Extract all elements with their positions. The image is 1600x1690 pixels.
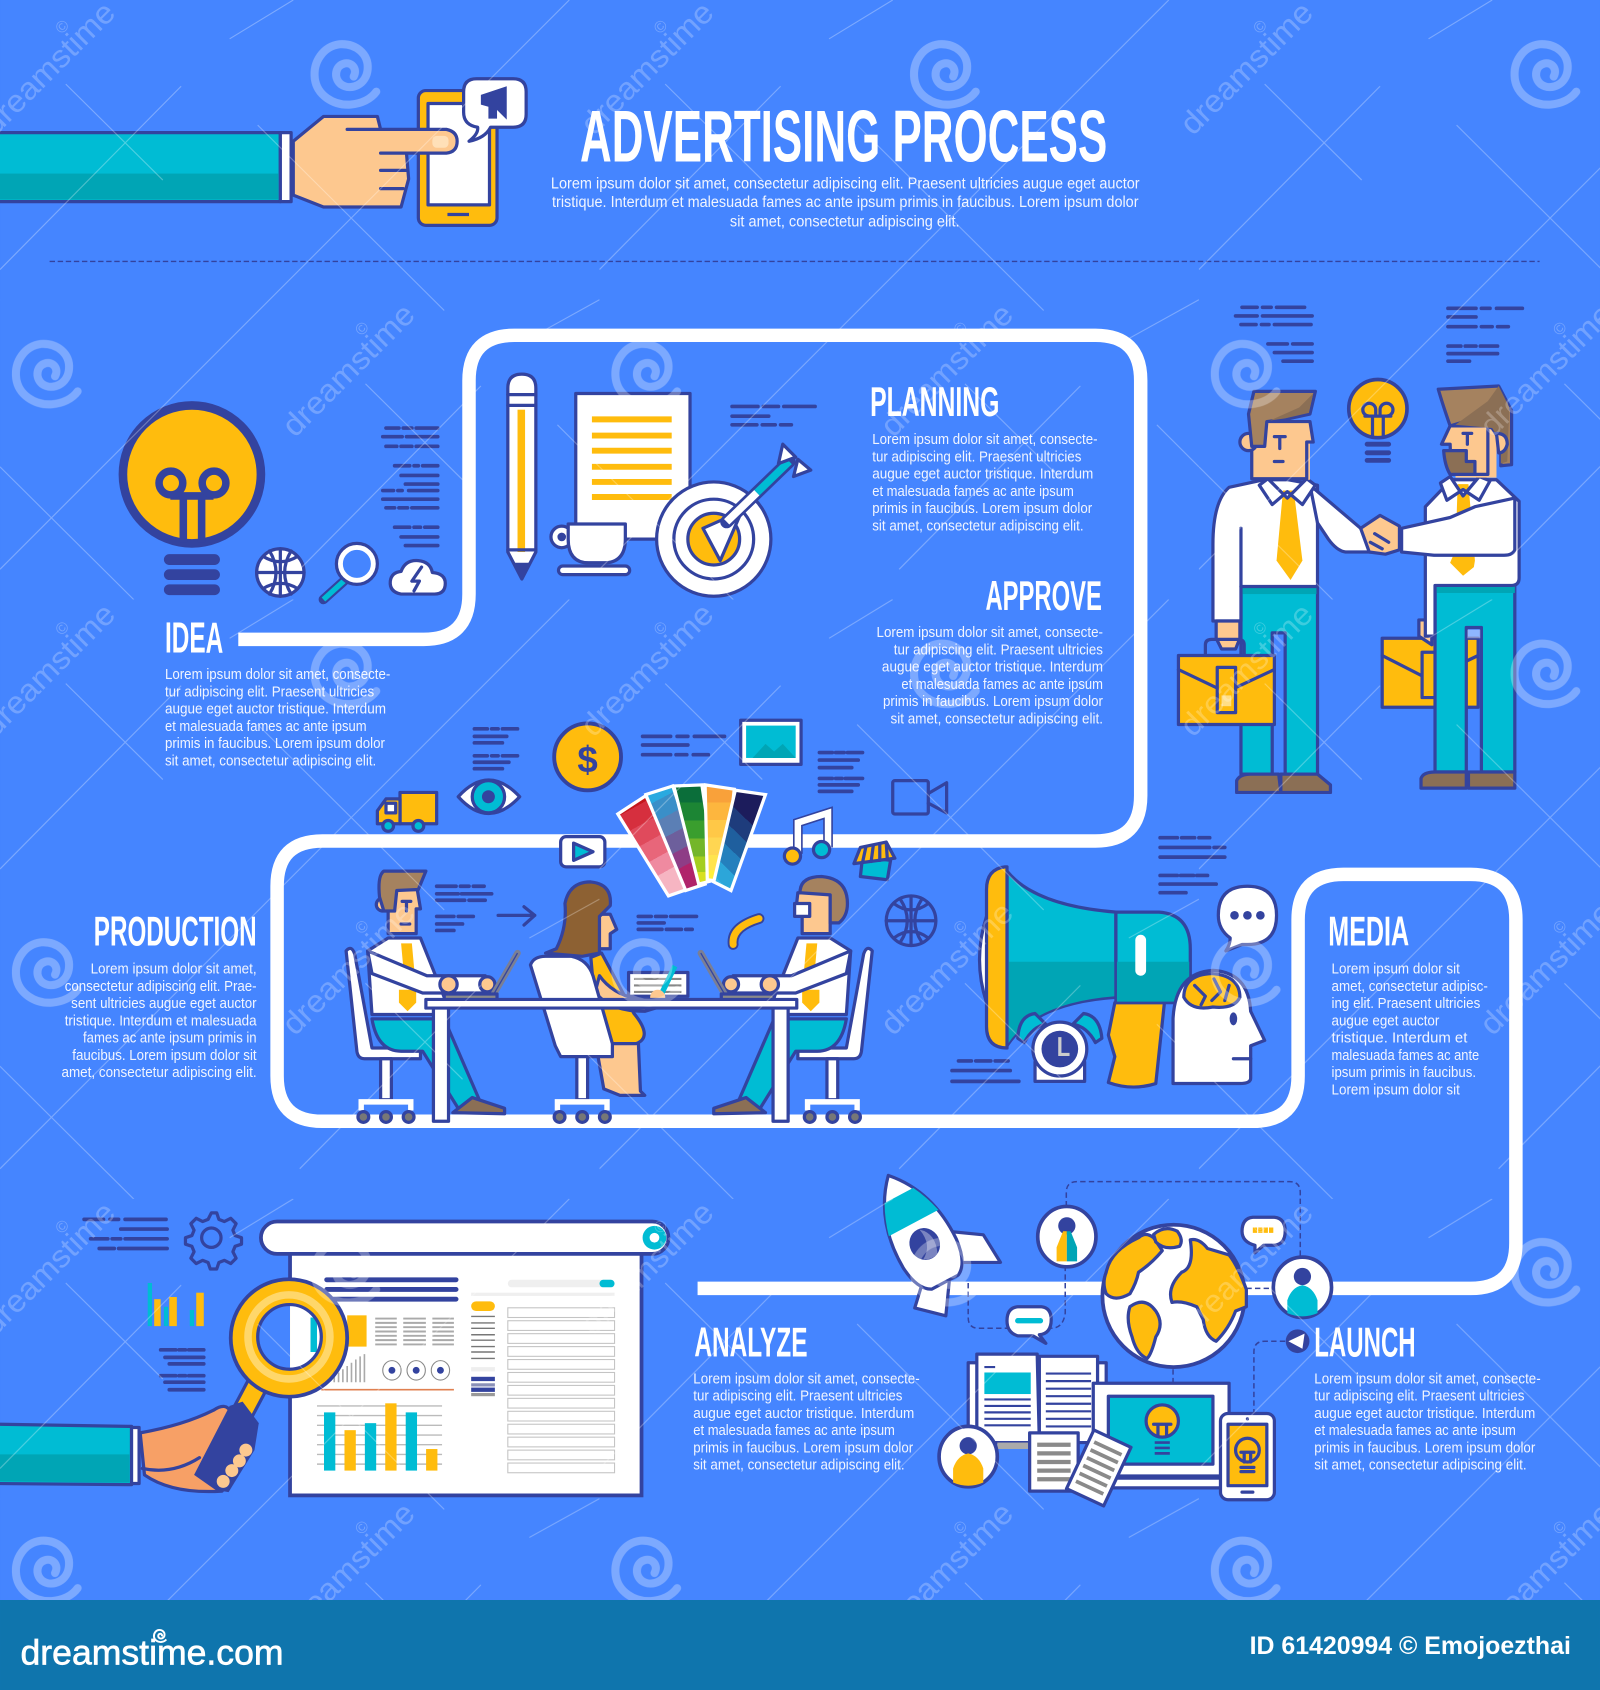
bar chart	[317, 1403, 442, 1471]
approve text	[877, 625, 1103, 727]
watermark overlay: ©	[1549, 917, 1571, 938]
launch text: et malesuada fames ac ante ipsum	[1314, 1423, 1516, 1439]
icon: speech bubble	[1218, 886, 1277, 951]
intro text	[551, 176, 1140, 230]
media text: tristique. Interdum et	[1332, 1031, 1467, 1047]
icon: picture frame	[741, 720, 801, 764]
approve text: tur adipiscing elit. Praesent ultricies	[894, 642, 1103, 658]
panel: idea	[123, 405, 445, 769]
heading: analyze: ANALYZE	[694, 1318, 808, 1365]
icon: video camera	[893, 781, 947, 814]
sleeve	[0, 133, 291, 202]
production text: faucibus. Lorem ipsum dolor sit	[72, 1048, 257, 1064]
icon: mini bar chart	[148, 1283, 204, 1326]
dashed connectors	[968, 1182, 1300, 1412]
icon: send arrow	[1286, 1329, 1309, 1353]
planning text: Lorem ipsum dolor sit amet, consecte-	[872, 432, 1098, 448]
icon: speech bubble	[1007, 1307, 1051, 1343]
sleeve	[0, 1424, 139, 1485]
watermark overlay: dreamstime	[275, 895, 422, 1042]
icon: globe	[257, 549, 304, 596]
analyze text: augue eget auctor tristique. Interdum	[693, 1406, 914, 1422]
seated man right	[701, 877, 872, 1122]
launch text: primis in faucibus. Lorem ipsum dolor	[1314, 1440, 1535, 1456]
heading: media: MEDIA	[1328, 908, 1409, 955]
panel: production	[61, 720, 947, 1122]
watermark overlay: dreamstime	[873, 297, 1020, 443]
text lines	[1160, 838, 1225, 893]
heading: idea: IDEA	[165, 614, 223, 662]
body text: sit amet, consectetur adipiscing elit.	[165, 753, 376, 769]
hand	[293, 116, 457, 207]
panel: launch	[854, 1148, 1541, 1506]
text lines	[819, 753, 863, 791]
icon: phone handset	[733, 919, 759, 944]
text lines	[161, 1350, 204, 1390]
watermark overlay: ©	[352, 318, 373, 339]
watermark overlay: dreamstime	[275, 1495, 422, 1642]
watermark overlay: ©	[1250, 16, 1271, 38]
body text: et malesuada fames ac ante ipsum	[165, 719, 367, 735]
body text: Lorem ipsum dolor sit amet, consecte-	[165, 667, 390, 683]
launch text: tur adipiscing elit. Praesent ultricies	[1314, 1389, 1525, 1405]
media text: Lorem ipsum dolor sit	[1332, 962, 1460, 978]
watermark overlay: ©	[950, 917, 971, 938]
approve text: et malesuada fames ac ante ipsum	[901, 677, 1103, 693]
handshake	[1361, 498, 1515, 555]
icon: rocket	[854, 1148, 1011, 1327]
planning text: et malesuada fames ac ante ipsum	[872, 484, 1074, 500]
launch text: Lorem ipsum dolor sit amet, consecte-	[1314, 1371, 1541, 1387]
analyze text: et malesuada fames ac ante ipsum	[693, 1423, 895, 1439]
icon: smartphone	[1220, 1413, 1274, 1500]
approve text: primis in faucibus. Lorem ipsum dolor	[883, 694, 1103, 710]
heading: production: PRODUCTION	[94, 908, 257, 955]
icon: play button	[561, 837, 605, 867]
watermark overlay: dreamstime	[1173, 0, 1320, 141]
analyze text: primis in faucibus. Lorem ipsum dolor	[693, 1440, 913, 1456]
heading: planning: PLANNING	[870, 378, 999, 425]
hand holding magnifier	[140, 1382, 259, 1492]
icon: target with arrow	[657, 444, 811, 596]
icon: gear	[185, 1213, 242, 1269]
icon: pencil	[508, 374, 536, 579]
icon: user avatar bottom	[939, 1426, 997, 1487]
icon: magnifier	[323, 543, 377, 599]
heading: approve: APPROVE	[985, 572, 1102, 619]
footer credit: ID 61420994 © Emojoezthai	[1250, 1633, 1571, 1660]
watermark overlay: ©	[650, 1216, 671, 1238]
planning text: tur adipiscing elit. Praesent ultricies	[872, 449, 1081, 465]
analyze text	[693, 1371, 920, 1474]
icon: megaphone	[980, 867, 1190, 1087]
table	[426, 999, 797, 1121]
report sheet	[290, 1251, 642, 1495]
text lines	[732, 406, 815, 425]
icon: light bulb	[123, 405, 261, 590]
watermark overlay: dreamstime	[1173, 1195, 1320, 1341]
icon: coffee cup	[551, 524, 630, 575]
production text: sent ultricies augue eget auctor	[71, 996, 257, 1012]
media text: malesuada fames ac ante	[1332, 1048, 1479, 1064]
media text: amet, consectetur adipisc-	[1332, 979, 1488, 995]
watermark overlay: dreamstime	[574, 596, 720, 743]
man with beard	[1382, 386, 1519, 788]
icon: alarm clock	[1018, 1013, 1102, 1081]
icon: eye	[458, 780, 520, 813]
text lines	[643, 736, 725, 755]
production text: amet, consectetur adipiscing elit.	[61, 1065, 257, 1081]
approve text: Lorem ipsum dolor sit amet, consecte-	[877, 625, 1103, 641]
body text: tur adipiscing elit. Praesent ultricies	[165, 684, 374, 700]
icon: magnifying glass	[231, 1279, 347, 1397]
footer logo: dreamstime.com	[20, 1633, 284, 1673]
analyze text: sit amet, consectetur adipiscing elit.	[693, 1458, 905, 1474]
arrow	[498, 907, 535, 925]
scroll roll	[261, 1222, 668, 1254]
panel: analyze	[0, 1213, 920, 1495]
title: ADVERTISING PROCESS	[580, 96, 1107, 178]
planning text: augue eget auctor tristique. Interdum	[872, 467, 1093, 483]
watermark overlay: ©	[52, 16, 73, 38]
watermark overlay: dreamstime	[574, 0, 720, 141]
icon: small speech bubble	[1242, 1217, 1285, 1253]
media text: augue eget auctor	[1332, 1013, 1439, 1029]
watermark overlay: ©	[352, 917, 373, 938]
header illustration: hand touching phone	[0, 79, 526, 225]
icon: document	[576, 394, 690, 539]
text lines	[638, 916, 696, 929]
watermark overlay: dreamstime	[275, 297, 422, 443]
icon: idea bulb	[1349, 380, 1407, 460]
icon: speech bubble with megaphone	[464, 79, 526, 141]
watermark overlay: ©	[650, 618, 671, 639]
planning text	[872, 432, 1098, 534]
icon: music note	[784, 813, 830, 864]
footer bar	[0, 1600, 1600, 1690]
icon: monitor	[1093, 1383, 1229, 1488]
intro text: sit amet, consectetur adipiscing elit.	[730, 213, 960, 230]
seated man left	[346, 871, 518, 1122]
approve text: augue eget auctor tristique. Interdum	[882, 660, 1103, 676]
body text	[165, 667, 390, 769]
launch text: augue eget auctor tristique. Interdum	[1314, 1406, 1535, 1422]
illustration: two businessmen shaking hands	[1178, 307, 1522, 792]
seated woman	[530, 882, 688, 1122]
media text: ing elit. Praesent ultricies	[1332, 996, 1480, 1012]
watermark overlay: ©	[352, 1517, 373, 1538]
panel: planning and approve	[508, 374, 1103, 727]
icon: dollar coin	[554, 723, 621, 790]
analyze text: Lorem ipsum dolor sit amet, consecte-	[693, 1371, 920, 1387]
man in front	[1178, 391, 1371, 792]
production text: fames ac ante ipsum primis in	[83, 1031, 257, 1047]
watermark overlay: ©	[950, 318, 971, 339]
icon: truck	[377, 792, 437, 831]
launch text	[1314, 1371, 1541, 1474]
watermark overlay: dreamstime	[873, 895, 1020, 1042]
launch text: sit amet, consectetur adipiscing elit.	[1314, 1458, 1527, 1474]
watermark overlay: ©	[1250, 618, 1271, 639]
production text: consectetur adipiscing elit. Prae-	[65, 979, 257, 995]
body text: augue eget auctor tristique. Interdum	[165, 702, 386, 718]
watermark overlay: dreamstime	[574, 1195, 720, 1341]
approve text: sit amet, consectetur adipiscing elit.	[891, 711, 1103, 727]
icon: colour swatch fan	[618, 785, 765, 896]
intro text: Lorem ipsum dolor sit amet, consectetur adipiscing elit. Praesent ultricies augue eget auctor	[551, 176, 1140, 193]
icon: smartphone	[418, 91, 497, 225]
watermark overlay: dreamstime	[873, 1495, 1020, 1642]
icon: dollar coin: $	[577, 739, 598, 780]
watermark overlay: dreamstime	[1173, 596, 1320, 743]
text lines	[383, 428, 438, 546]
icon: storefront	[854, 842, 895, 880]
text lines	[474, 729, 518, 769]
production text: Lorem ipsum dolor sit amet,	[91, 962, 257, 978]
watermark overlay: ©	[52, 618, 73, 639]
watermark overlay: ©	[1549, 1517, 1571, 1538]
icon: globe outline	[886, 896, 936, 946]
text lines	[437, 886, 492, 930]
media text: Lorem ipsum dolor sit	[1332, 1082, 1460, 1098]
text lines	[84, 1219, 167, 1248]
icon: open book	[968, 1354, 1106, 1449]
process path	[238, 335, 1516, 1288]
icon: papers	[1030, 1430, 1131, 1506]
planning text: primis in faucibus. Lorem ipsum dolor	[872, 501, 1092, 517]
planning text: sit amet, consectetur adipiscing elit.	[872, 518, 1084, 534]
icon: cloud	[390, 561, 445, 594]
icon: globe with continents	[1102, 1225, 1246, 1367]
watermark overlay: ©	[1549, 318, 1571, 339]
watermark overlay: ©	[950, 1517, 971, 1538]
heading: launch: LAUNCH	[1314, 1318, 1416, 1365]
panel: media	[952, 838, 1488, 1098]
text lines	[1236, 307, 1522, 361]
icon: user avatar top	[1038, 1206, 1096, 1267]
fingernail	[432, 136, 449, 148]
watermark overlay: ©	[1250, 1216, 1271, 1238]
icon: head with brain	[1173, 970, 1265, 1084]
body text: primis in faucibus. Lorem ipsum dolor	[165, 736, 385, 752]
watermark overlay: ©	[52, 1216, 73, 1238]
intro text: tristique. Interdum et malesuada fames ac ante ipsum primis in faucibus. Lorem ipsum dolor	[552, 194, 1139, 211]
analyze text: tur adipiscing elit. Praesent ultricies	[693, 1389, 902, 1405]
watermark overlay: ©	[650, 16, 671, 38]
production text	[61, 962, 257, 1081]
media text	[1332, 962, 1488, 1098]
production text: tristique. Interdum et malesuada	[65, 1013, 257, 1029]
media text: ipsum primis in faucibus.	[1332, 1065, 1476, 1081]
icon: user avatar right	[1273, 1257, 1332, 1317]
